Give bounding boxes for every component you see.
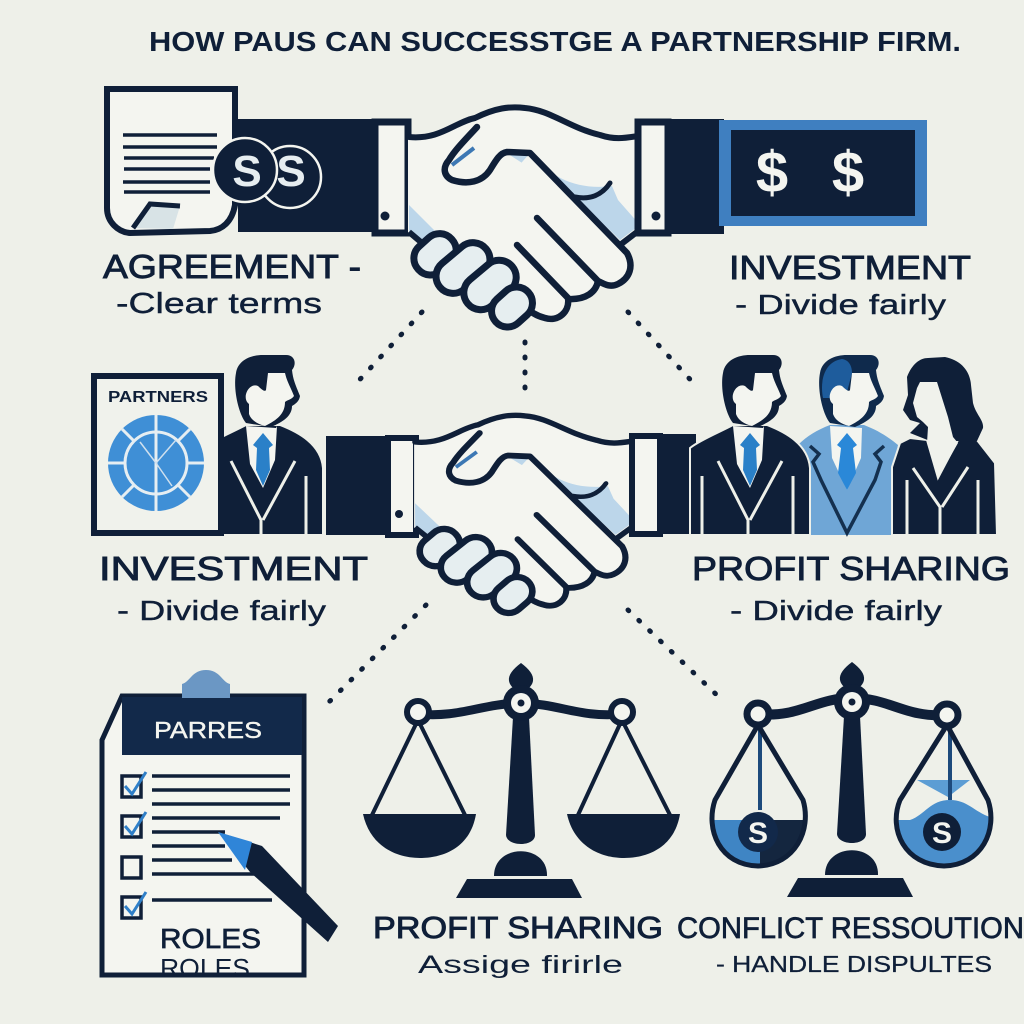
icon: man in blue suit: [797, 355, 898, 535]
icon: woman: [892, 357, 997, 535]
dotted connectors: lower: [325, 605, 722, 706]
icon: clipboard: [102, 670, 304, 975]
icon: contract document: [107, 89, 235, 233]
icon: balance scale: [363, 663, 680, 898]
label: investment: INVESTMENT: [729, 249, 971, 286]
icon: balance scale with coins: S: [748, 817, 768, 850]
icon: dollar coins: [213, 138, 321, 208]
icon: man: [690, 355, 810, 535]
panel: roles clipboard: [102, 670, 338, 983]
icon: banknote: $: [832, 140, 864, 205]
panel: profit sharing scale: [363, 663, 680, 979]
text: roles: ROLES: [160, 953, 250, 983]
icon: dollar coins: S: [232, 147, 262, 196]
icon: partners document: PARTNERS: [108, 389, 208, 406]
icon: sleeve: [238, 119, 378, 232]
panel: partners chart and person: [94, 355, 323, 535]
label: profit sharing: PROFIT SHARING: [373, 910, 663, 945]
dotted connectors: upper: [352, 312, 698, 392]
icon: clipboard: PARRES: [154, 717, 262, 743]
panel: agreement: [103, 89, 378, 320]
label: conflict resolution: CONFLICT RESSOUTION: [677, 912, 1024, 945]
title: HOW PAUS CAN SUCCESSTGE A PARTNERSHIP FIRM.: [149, 26, 961, 57]
group: three partners: [690, 355, 997, 535]
panel: investment top right: [719, 120, 971, 320]
label: profit sharing middle: PROFIT SHARING: [692, 550, 1010, 587]
icon: banknote: $: [756, 140, 788, 205]
icon: balance scale with coins: [700, 662, 1000, 897]
icon: banknote: [719, 120, 927, 226]
label: agreement: AGREEMENT -: [103, 248, 361, 285]
handshake: middle: [326, 415, 696, 619]
icon: businessman: [203, 355, 323, 535]
text: divide fairly middle: - Divide fairly: [117, 595, 326, 626]
icon: partners document: [94, 376, 221, 533]
label: investment middle: INVESTMENT: [99, 550, 368, 587]
handshake: top: [375, 107, 724, 334]
text: divide fairly right: - Divide fairly: [730, 595, 942, 626]
text: assign fairly: Assige firirle: [418, 951, 623, 979]
icon: pen: [218, 832, 338, 942]
label: roles: ROLES: [160, 923, 261, 954]
icon: dollar coins: S: [276, 147, 306, 196]
text: divide fairly: - Divide fairly: [735, 289, 946, 320]
text: clear terms: -Clear terms: [116, 288, 322, 320]
panel: conflict resolution scale: [677, 662, 1024, 977]
icon: balance scale with coins: S: [932, 817, 952, 850]
text: handle disputes: - HANDLE DISPULTES: [716, 951, 992, 977]
